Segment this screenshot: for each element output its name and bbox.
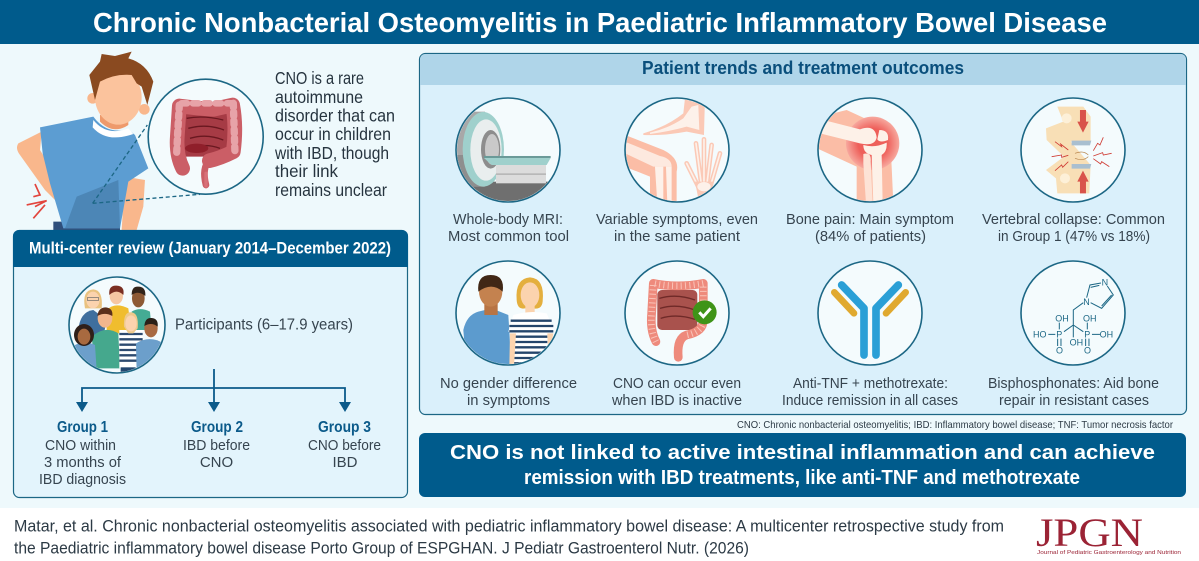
text: whole-body MRI	[448, 211, 569, 245]
icon: bisphosphonate molecule: P	[1056, 329, 1062, 339]
conclusion banner: CNO is not linked to active intestinal inflammation and can achieve	[450, 441, 1155, 464]
icon: bisphosphonate molecule: N	[1083, 297, 1090, 307]
text: vertebral collapse	[982, 211, 1165, 245]
group 1: IBD diagnosis	[39, 471, 126, 488]
icon: inflamed intestine in circle	[148, 79, 263, 194]
panel: multi-center review	[13, 230, 408, 498]
group 2: Group 2	[191, 419, 243, 436]
group 1: Group 1	[57, 419, 108, 436]
citation	[14, 518, 1004, 558]
icon: bisphosphonate molecule: OH	[1055, 314, 1069, 324]
text: variable symptoms: Variable symptoms, even	[596, 211, 758, 228]
text: participants: Participants (6–17.9 years)	[175, 316, 353, 334]
icon: MRI scanner	[453, 98, 563, 205]
text: CNO description: CNO is a rare	[275, 68, 364, 88]
text: bone pain: Bone pain: Main symptom	[786, 211, 954, 228]
group 3: CNO before	[308, 437, 381, 454]
title banner	[0, 0, 1199, 44]
illustration: boy with back pain	[17, 52, 200, 230]
text: CNO with inactive IBD	[611, 375, 742, 409]
icon: bisphosphonate molecule: HO	[1033, 329, 1046, 339]
journal logo	[1036, 510, 1181, 556]
panel: patient trends and treatment outcomes	[420, 54, 1186, 414]
text: CNO description: autoimmune	[275, 87, 363, 107]
icon: bisphosphonate molecule: P	[1084, 329, 1090, 339]
icon: bisphosphonate molecule: N	[1102, 278, 1108, 288]
icon: participants group	[69, 277, 165, 374]
group 1: CNO within	[45, 437, 116, 454]
group 3: IBD	[332, 454, 358, 471]
group 3: Group 3	[318, 419, 371, 436]
journal logo: Journal of Pediatric Gastroenterology and Nutrition	[1037, 550, 1181, 556]
panel heading: Multi-center review (January 2014–December 2022)	[29, 238, 391, 258]
text: bisphosphonates	[988, 375, 1159, 409]
icon: bisphosphonate molecule: O	[1056, 345, 1063, 355]
text: bone pain	[786, 211, 954, 245]
text: anti-TNF: Induce remission in all cases	[782, 392, 958, 409]
conclusion banner: remission with IBD treatments, like anti-TNF and methotrexate	[524, 466, 1080, 489]
group 1: 3 months of	[44, 454, 122, 471]
text: CNO description: remains unclear	[275, 180, 387, 200]
text: variable symptoms: in the same patient	[614, 228, 741, 245]
icon: bisphosphonate molecule	[1021, 261, 1125, 365]
icon: healthy intestine with check mark	[625, 261, 729, 365]
panel heading	[420, 54, 1186, 85]
text: no gender difference: No gender difference	[440, 375, 577, 392]
group 3	[308, 419, 381, 471]
icon: antibody	[818, 261, 922, 365]
text: bisphosphonates: repair in resistant cases	[999, 392, 1149, 409]
group 2	[183, 419, 250, 471]
text: CNO description: occur in children	[275, 124, 391, 144]
journal logo: JPGN	[1036, 510, 1143, 555]
icon: bisphosphonate molecule: OH	[1083, 314, 1096, 324]
icon: bisphosphonate molecule: OH	[1070, 338, 1083, 348]
text: CNO description: their link	[275, 161, 338, 181]
panel heading: Patient trends and treatment outcomes	[642, 58, 964, 78]
text: CNO with inactive IBD: CNO can occur even	[613, 375, 741, 392]
text: CNO with inactive IBD: when IBD is inactive	[611, 392, 742, 409]
conclusion banner	[419, 433, 1186, 497]
citation: Matar, et al. Chronic nonbacterial osteomyelitis associated with pediatric inflammatory bowel disease: A multicenter retrospective study from	[14, 518, 1004, 536]
group 2: IBD before	[183, 437, 250, 454]
text: no gender difference: in symptoms	[467, 392, 550, 409]
icon: painful knee joint	[813, 98, 922, 203]
icon: bisphosphonate molecule: OH	[1100, 329, 1113, 339]
panel heading	[13, 230, 408, 267]
text: no gender difference	[440, 375, 577, 409]
title banner: Chronic Nonbacterial Osteomyelitis in Paediatric Inflammatory Bowel Disease	[93, 7, 1107, 38]
citation: the Paediatric inflammatory bowel disease Porto Group of ESPGHAN. J Pediatr Gastroenterol Nutr. (2026)	[14, 540, 749, 558]
text: whole-body MRI: Most common tool	[448, 228, 569, 245]
text: variable symptoms	[596, 211, 758, 245]
text: whole-body MRI: Whole-body MRI:	[453, 211, 563, 228]
text: CNO description: disorder that can	[275, 106, 395, 126]
group 2: CNO	[200, 454, 233, 471]
text: CNO description	[274, 68, 395, 200]
text: vertebral collapse: Vertebral collapse: Common	[982, 211, 1165, 228]
icon: bisphosphonate molecule: O	[1084, 345, 1091, 355]
text: bone pain: (84% of patients)	[815, 228, 926, 245]
text: anti-TNF: Anti-TNF + methotrexate:	[793, 375, 948, 392]
text: vertebral collapse: in Group 1 (47% vs 18%)	[998, 228, 1150, 245]
text: anti-TNF	[782, 375, 958, 409]
icon: foot, knee and hand bones	[625, 98, 729, 203]
text: CNO description: with IBD, though	[274, 143, 389, 163]
group 1	[39, 419, 126, 488]
text: bisphosphonates: Bisphosphonates: Aid bone	[988, 375, 1159, 392]
icon: man and woman	[456, 261, 560, 370]
icon: vertebral collapse	[1021, 98, 1125, 202]
flow arrows	[76, 369, 351, 412]
